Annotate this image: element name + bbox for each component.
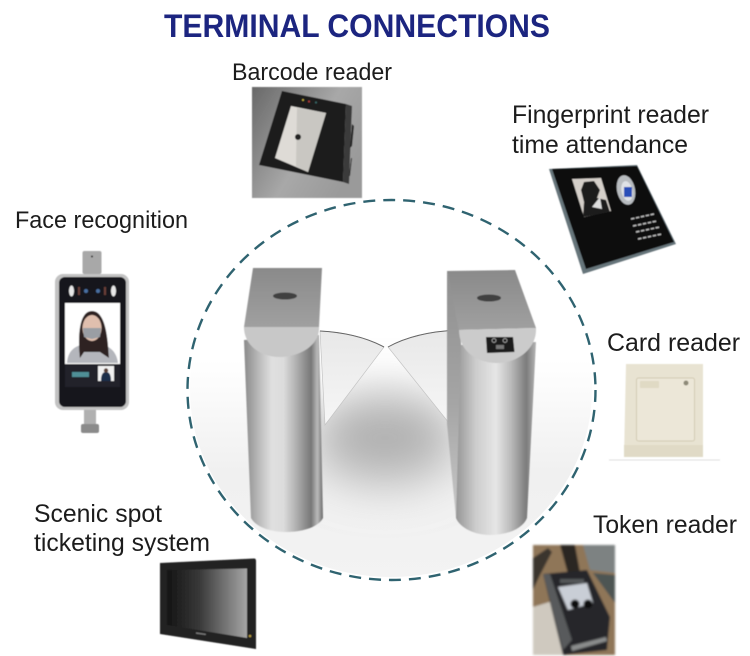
- barcode reader: [232, 59, 392, 198]
- left pedestal: [244, 268, 323, 532]
- token reader: [533, 511, 737, 655]
- right glass wing: [388, 330, 458, 423]
- card reader: [607, 329, 740, 460]
- icon: token reader device: [533, 545, 615, 655]
- label: scenic spot: Scenic spot: [34, 500, 162, 528]
- floor shading: [190, 203, 592, 577]
- icon: fingerprint terminal: [549, 165, 676, 274]
- dashed ring: [188, 200, 596, 580]
- floor shadow: [313, 394, 457, 482]
- label: ticketing system: ticketing system: [34, 529, 210, 557]
- icon: card reader device: [609, 364, 720, 460]
- icon: monitor: [160, 558, 256, 649]
- label: barcode reader: Barcode reader: [232, 59, 392, 86]
- label: card reader: Card reader: [607, 329, 740, 357]
- label: time attendance: time attendance: [512, 131, 688, 159]
- label: face recognition: Face recognition: [15, 207, 188, 234]
- fingerprint reader: [512, 101, 709, 274]
- control panel: [486, 337, 514, 353]
- label: token reader: Token reader: [593, 511, 737, 539]
- icon: face recognition terminal: [55, 251, 129, 433]
- face recognition: [15, 207, 188, 433]
- right pedestal: [447, 270, 536, 535]
- title: TERMINAL CONNECTIONS: [164, 8, 550, 44]
- scenic spot ticketing system: [34, 500, 256, 649]
- icon: barcode reader device: [252, 87, 362, 198]
- label: fingerprint reader: Fingerprint reader: [512, 101, 709, 129]
- central circle with turnstile: [188, 200, 596, 580]
- left glass wing: [320, 331, 384, 425]
